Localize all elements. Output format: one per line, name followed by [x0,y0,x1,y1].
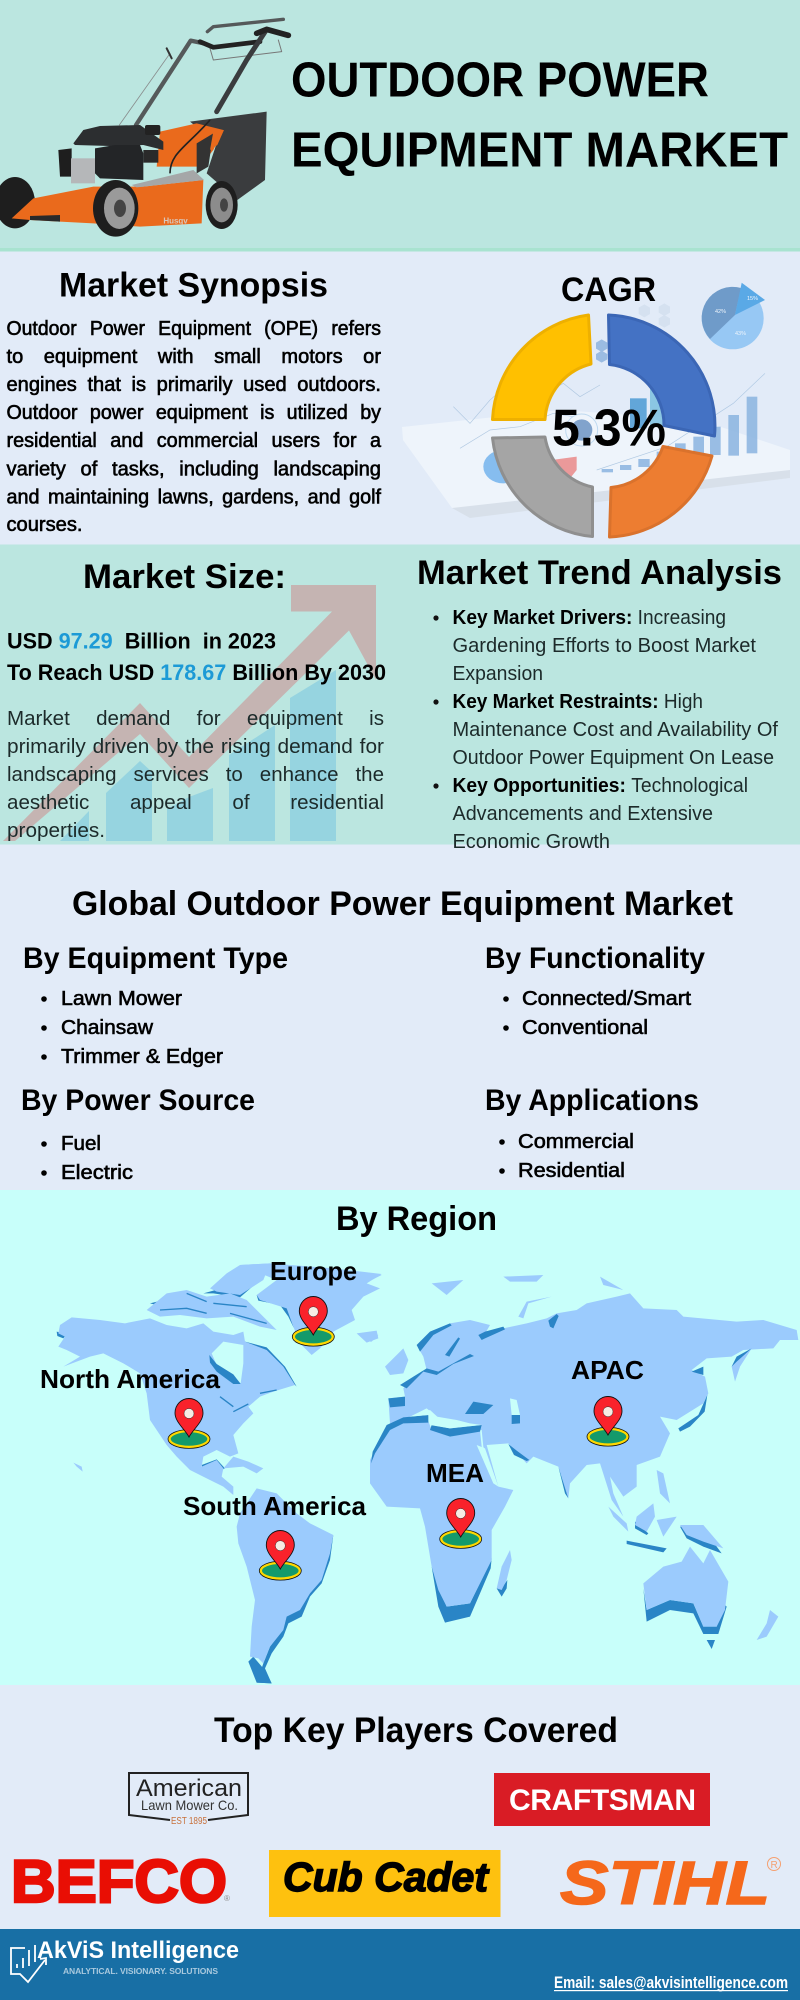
title [291,54,788,178]
pin: APAC [571,1355,644,1446]
text: market size description: properties. [7,820,105,842]
stat: market size values: USD 97.29 Billion in 2023 [7,628,276,654]
text: synopsis: Outdoor power equipment is utilized by [6,402,381,424]
heading: market trend analysis: Market Trend Analysis [417,554,782,592]
logo: Cub Cadet [269,1850,500,1917]
logo: Stihl: R [770,1860,778,1871]
panel: footer [0,1929,800,2000]
panel: header [0,0,800,252]
chart: pie: 42% [715,309,726,315]
segment: by functionality: Connected/Smart [522,988,691,1010]
text: market size description: primarily driven by the rising demand for [7,736,384,758]
icon: lawn mower [0,19,288,237]
segment: by applications [485,1084,699,1182]
text: synopsis: to equipment with small motors or [6,346,381,368]
pin: MEA: MEA [426,1458,484,1488]
list: market trends [433,607,778,853]
chart background: rising arrow and bars [3,585,376,841]
list: market trends: Gardening Efforts to Boost Market [452,635,756,657]
map: world [57,1263,798,1683]
list: market trends: Maintenance Cost and Availability Of [452,719,778,741]
list: market trends: Outdoor Power Equipment On Lease [452,747,774,769]
pin: Europe [270,1256,357,1346]
stat: market size values: To Reach USD 178.67 Billion By 2030 [7,660,386,685]
segment: by applications: Residential [518,1160,625,1182]
chart: pie: 43% [735,331,746,337]
list: market trends: Advancements and Extensive [452,803,713,825]
segment: by equipment type [23,942,288,1068]
heading: global market: Global Outdoor Power Equipment Market [72,885,733,923]
pin: MEA [426,1458,484,1548]
segment: by equipment type: Chainsaw [61,1017,154,1039]
icon: lawn mower: Husqv [163,216,188,225]
panel: key players [0,1685,800,1929]
segment: by power source [21,1084,255,1184]
pin: Europe: Europe [270,1256,357,1286]
text: synopsis: residential and commercial users for a [6,430,382,452]
map: americas and greenland [57,1263,382,1683]
text: synopsis: courses. [6,514,82,536]
pin: South America [183,1491,367,1580]
list: market trends: Economic Growth [452,831,610,853]
text: market size description [7,708,384,842]
segment: by functionality: By Functionality [485,942,705,975]
segment: by applications: By Applications [485,1084,699,1117]
segment: by equipment type: Trimmer & Edger [61,1046,223,1068]
segment: by functionality: Conventional [522,1017,648,1039]
heading: by region: By Region [336,1200,497,1238]
segment: by equipment type: By Equipment Type [23,942,288,975]
text: market size description: landscaping services to enhance the [7,764,384,786]
logo: American Lawn Mower: American [136,1775,242,1802]
title: OUTDOOR POWER [291,54,709,108]
pin: North America [40,1364,221,1448]
list: market trends: Key Market Restraints: High [452,691,703,713]
pin: APAC: APAC [571,1355,644,1385]
chart: donut [492,315,715,537]
icon: AkViS logo [11,1945,46,1982]
logo: Befco: ® [224,1894,230,1903]
list: market trends: Expansion [452,663,543,685]
list: market trends: Key Market Drivers: Increasing [452,607,726,629]
text: synopsis: Outdoor Power Equipment (OPE) refers [6,318,381,340]
logo: Craftsman: CRAFTSMAN [509,1784,696,1817]
chart: pie: 15% [747,296,758,302]
logo: American Lawn Mower: EST 1895 [171,1816,207,1827]
brand: AkViS Intelligence [37,1937,239,1976]
stat: market size values [7,628,386,685]
list: market trends: Key Opportunities: Technological [452,775,748,797]
segment: by applications: Commercial [518,1131,634,1153]
chart: pie [702,283,765,349]
title: EQUIPMENT MARKET [291,124,788,178]
logo: Befco: BEFCO [11,1848,227,1915]
segment: by power source: Electric [61,1162,133,1184]
logo: Craftsman [494,1773,710,1826]
pin: South America: South America [183,1491,367,1521]
heading: market size: Market Size: [83,558,286,596]
segment: by power source: By Power Source [21,1084,255,1117]
chart background: tablet with charts [402,283,790,518]
panel: market size and trends [0,544,800,853]
logo: Stihl: STIHL [560,1849,770,1917]
pin: North America: North America [40,1364,221,1394]
panel: segmentation [0,844,800,1190]
brand: AkViS Intelligence: AkViS Intelligence [37,1937,239,1964]
text: synopsis: engines that is primarily used outdoors. [6,374,381,396]
text: synopsis: and maintaining lawns, gardens, and golf [6,486,381,508]
segment: by equipment type: Lawn Mower [61,988,182,1010]
stat: 5.3%: 5.3% [552,400,666,458]
map: eurasia, africa and oceania [370,1273,798,1649]
panel: market synopsis [0,252,800,544]
heading: CAGR: CAGR [561,271,656,309]
segment: by functionality [485,942,705,1039]
brand: AkViS Intelligence: ANALYTICAL. VISIONARY. SOLUTIONS [63,1966,218,1976]
logo: American Lawn Mower: Lawn Mower Co. [141,1797,238,1813]
text: market size description: Market demand for equipment is [7,708,384,730]
heading: top key players: Top Key Players Covered [214,1711,618,1750]
text: market size description: aesthetic appeal of residential [7,792,384,814]
panel: by region [0,1190,800,1685]
heading: market synopsis: Market Synopsis [59,266,328,304]
text: synopsis [6,318,382,536]
logo: Cub Cadet: Cub Cadet [283,1854,490,1900]
text: synopsis: variety of tasks, including landscaping [6,458,381,480]
logo: American Lawn Mower [129,1773,248,1827]
segment: by power source: Fuel [61,1133,101,1155]
